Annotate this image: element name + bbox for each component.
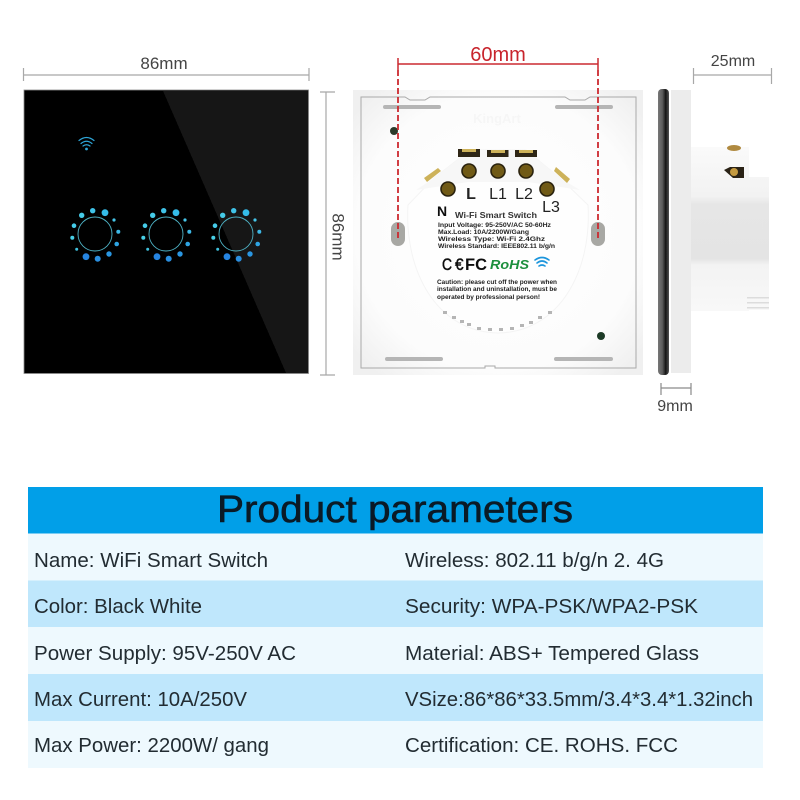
- terminal module: [408, 149, 588, 333]
- row 5: Certification: CE. ROHS. FCC: [405, 735, 678, 757]
- terminal module: Wireless Standard: IEEE802.11 b/g/n: [438, 244, 555, 250]
- dimension: front height 86mm: 86mm: [328, 213, 348, 261]
- certification marks: [442, 255, 549, 274]
- row 2: Security: WPA-PSK/WPA2-PSK: [405, 596, 699, 618]
- row 2: Color: Black White: [34, 596, 202, 618]
- terminal module: L2: [515, 186, 533, 203]
- row 3: Power Supply: 95V-250V AC: [34, 643, 296, 665]
- terminal module: Max.Load: 10A/2200W/Gang: [438, 230, 529, 236]
- terminal module: Wireless Type: Wi-Fi 2.4Ghz: [438, 237, 545, 243]
- terminal module: operated by professional person!: [437, 295, 540, 301]
- row 4: [28, 674, 763, 721]
- terminal module: L3: [542, 199, 560, 216]
- panel: switch side view: [658, 89, 769, 375]
- dimension: mounting distance 60mm: [398, 44, 598, 240]
- row 5: Max Power: 2200W/ gang: [34, 735, 269, 757]
- row 1: Name: WiFi Smart Switch: [34, 550, 268, 572]
- row 3: [28, 627, 763, 674]
- icon: touch button 2: [141, 208, 191, 262]
- row 1: [28, 534, 763, 580]
- dimension: front height 86mm: [320, 92, 348, 375]
- row 4: Max Current: 10A/250V: [34, 689, 248, 711]
- dimension: depth 25mm: 25mm: [711, 53, 755, 70]
- row 5: [28, 721, 763, 768]
- terminal module: L1: [489, 186, 507, 203]
- row 1: Wireless: 802.11 b/g/n 2. 4G: [405, 550, 664, 572]
- row 3: Material: ABS+ Tempered Glass: [405, 643, 699, 665]
- terminal module: Input Voltage: 95-250V/AC 50-60Hz: [438, 223, 551, 229]
- table: product parameters: [28, 487, 763, 768]
- brass screws: [724, 145, 744, 178]
- terminal module: Wi-Fi Smart Switch: [455, 211, 537, 220]
- dimension: front width 86mm: [24, 54, 309, 81]
- icon: touch button 3: [211, 208, 261, 262]
- terminal module: N: [437, 203, 447, 219]
- certification marks: FC: [465, 255, 487, 274]
- terminal module: installation and uninstallation, must be: [437, 287, 558, 293]
- certification marks: C: [442, 255, 452, 274]
- row 4: VSize:86*86*33.5mm/3.4*3.4*1.32inch: [405, 689, 753, 711]
- dimension: plate thickness 9mm: [657, 383, 693, 415]
- panel: black glass front: [24, 90, 308, 374]
- panel: switch back view: [353, 90, 643, 375]
- terminal module: L: [466, 186, 476, 203]
- icon: wifi status: [79, 138, 94, 150]
- table header: Product parameters: [217, 489, 573, 531]
- panel: switch back view: KingArt: [473, 111, 521, 126]
- dimension: front width 86mm: 86mm: [140, 54, 188, 73]
- row 2: [28, 580, 763, 627]
- table header: [28, 487, 763, 534]
- certification marks: RoHS: [490, 257, 529, 272]
- icon: touch button 1: [70, 208, 120, 262]
- dimension: plate thickness 9mm: 9mm: [657, 398, 693, 415]
- dimension: mounting distance 60mm: 60mm: [470, 44, 526, 66]
- terminal module: Caution: please cut off the power when: [437, 280, 557, 286]
- certification marks: €: [455, 255, 464, 274]
- dimension: depth 25mm: [694, 53, 772, 84]
